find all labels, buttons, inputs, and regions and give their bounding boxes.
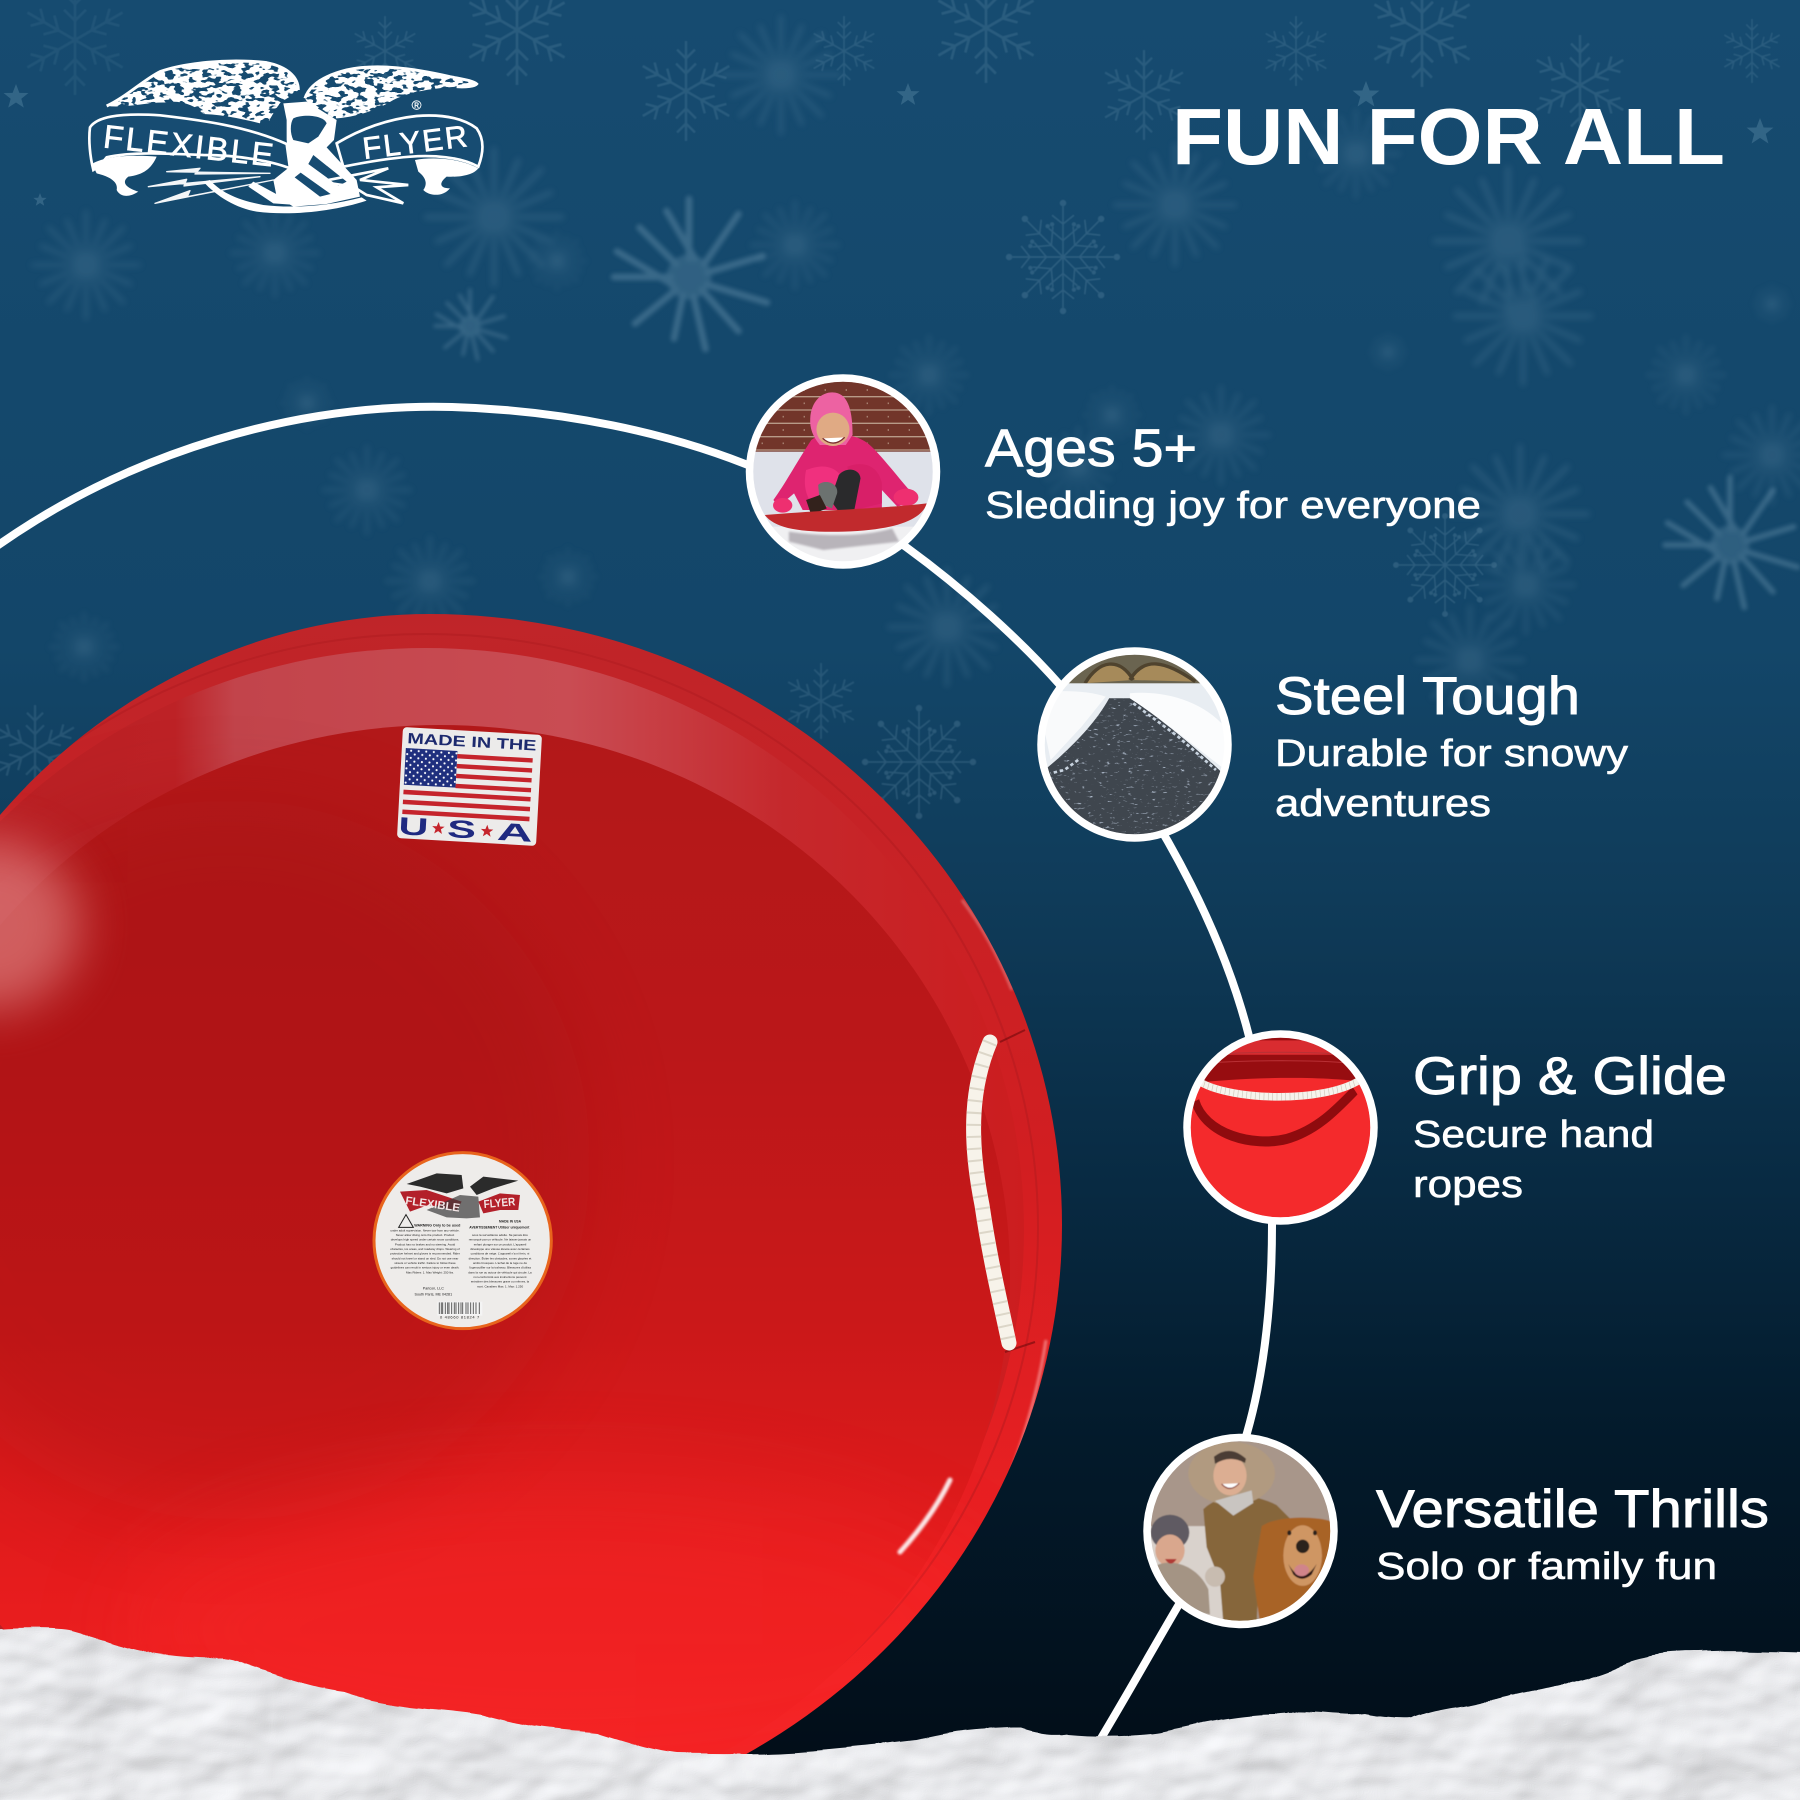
label fine print: conditions de neige. L'appareil n'a ni frein, ni: [471, 1252, 530, 1256]
label fine print: Paricon, LLC: [423, 1286, 444, 1290]
feature text: steel tough: Steel Tough: [1275, 667, 1580, 726]
feature text: ages 5+: Ages 5+: [985, 419, 1197, 478]
label fine print: Max Riders: 1. Max Weight: 250 lbs.: [406, 1270, 454, 1274]
feature text: steel tough: Durable for snowy: [1275, 733, 1628, 775]
label fine print: develops high speed under certain snow conditions.: [391, 1238, 459, 1242]
feature text: ages 5+: [985, 419, 1481, 527]
sled rim ring lines: [70, 633, 1039, 1664]
label fine print: obstacles, ice areas, and roadway drops. Wearing of: [390, 1247, 460, 1251]
feature text: grip and glide: ropes: [1413, 1164, 1523, 1206]
circle photo: child on sled: [746, 374, 940, 569]
child snowsuit: [773, 434, 918, 510]
label fine print: mort. Cavaliers Max: 1. Max: 1.250: [477, 1284, 523, 1288]
left gloss highlight: [0, 840, 80, 1010]
snow bank: [0, 1628, 1800, 1800]
lower sweep: [203, 180, 367, 213]
sticker: made in the USA: U: [398, 813, 429, 842]
mittens: [773, 498, 792, 513]
dog: [1253, 1518, 1333, 1623]
label fine print: arrêts brusques. L'achat de la luge ne de: [473, 1261, 527, 1265]
specular streaks: [900, 1480, 950, 1552]
feature text: versatile thrills: [1376, 1480, 1769, 1588]
label fine print: MADE IN USA: [499, 1220, 522, 1224]
feature text: grip and glide: Secure hand: [1413, 1114, 1654, 1156]
label fine print: non-conformité aux instructions peuvent: [474, 1275, 527, 1279]
barcode: [437, 1302, 482, 1320]
label fine print: remorqué par un véhicule. Ne laisser jamais un: [469, 1238, 532, 1242]
connecting curved line: [0, 407, 1272, 1740]
sticker: made in the USA: A: [496, 819, 533, 848]
logo text FLYER: FLYER: [361, 119, 469, 166]
arrows: [148, 168, 408, 203]
label fine print: entraîner des blessures grave ou mêmes, la: [471, 1280, 529, 1284]
eagle right wing: [305, 67, 477, 118]
label fine print: should not kneel or stand on sled. Do not use near: [392, 1256, 458, 1260]
label fine print: protective helmet and gloves is recommended. Rider: [390, 1252, 460, 1256]
eagle left wing: [107, 61, 298, 125]
label fine print: Never allow diving onto the product. Product: [396, 1233, 454, 1237]
label fine print: développe une vitesse élevée avec certaines: [470, 1247, 530, 1251]
label fine print: enfant plonger sur ce produit. L'appareil: [474, 1242, 527, 1246]
label logo: FLYER: [483, 1196, 516, 1211]
barcode: 0 48660 81824 7: [440, 1315, 480, 1320]
sled inner dish: [0, 725, 1010, 1800]
feature text: grip and glide: Grip & Glide: [1413, 1047, 1727, 1106]
sled body and rim: [0, 614, 1062, 1800]
label fine print: direction. Éviter les obstacles, zones glacées et: [469, 1255, 532, 1260]
warning triangle: [399, 1215, 413, 1227]
feature text: steel tough: adventures: [1275, 783, 1491, 825]
sticker: made in the USA: [397, 727, 542, 848]
rope shadow: [1195, 1090, 1355, 1141]
label fine print: l'ogenouilller sur la traîneau. Blessures d'utilisa: [469, 1266, 531, 1270]
sticker: made in the USA: S: [446, 816, 477, 845]
handle slits: [1000, 1030, 1035, 1352]
left ribbon: [89, 115, 290, 170]
label fine print: sous la surveillance adulte. Ne jamais être: [472, 1233, 528, 1237]
feature text: versatile thrills: Solo or family fun: [1376, 1546, 1717, 1588]
feature text: versatile thrills: Versatile Thrills: [1376, 1480, 1769, 1539]
label fine print: guidelines can result in serious injury or even death.: [391, 1266, 459, 1270]
rope: [1200, 1080, 1360, 1097]
label fine print: South Paris, ME 04281: [415, 1292, 452, 1296]
Flexible Flyer logo: [89, 61, 482, 213]
registered mark: ®: [412, 97, 422, 112]
logo text FLEXIBLE: FLEXIBLE: [102, 117, 275, 173]
sled in photo: [765, 503, 927, 532]
feature text: grip and glide: [1413, 1047, 1727, 1206]
label fine print: under adult supervision. Never tow from any vehicle.: [390, 1228, 460, 1232]
background snowflakes: [0, 0, 1800, 819]
circle photo: rope handle on red sled: [1183, 1029, 1380, 1227]
label fine print: WARNING Only to be used: [414, 1224, 460, 1228]
right ribbon: [337, 116, 482, 167]
label fine print: AVERTISSEMENT Utiliser uniquement: [469, 1226, 530, 1230]
child: [1151, 1515, 1189, 1550]
round warning label: [374, 1153, 551, 1329]
circle photo: family with dog: [1143, 1434, 1340, 1631]
feature text: ages 5+: Sledding joy for everyone: [985, 485, 1481, 527]
eagle body and shield: [273, 102, 360, 207]
label fine print: streets or vehicle traffic. Failure to follow these: [394, 1261, 456, 1265]
woman coat and hood: [1203, 1496, 1293, 1623]
label fine print: Product has no brakes and no steering. Avoid: [395, 1242, 455, 1246]
feature text: steel tough: [1275, 667, 1628, 825]
sled: [0, 614, 1062, 1800]
sticker: made in the USA: MADE IN THE: [407, 731, 537, 755]
circle photo: shovelled snowy path: [1037, 647, 1233, 843]
label fine print: dans la rue ou autour de véhicule qui circule. La: [468, 1270, 532, 1274]
label logo: [400, 1173, 520, 1218]
rope handle: [974, 1042, 1009, 1343]
label fine print: [390, 1220, 532, 1296]
title: FUN FOR ALL: [1172, 92, 1725, 181]
boots: [833, 470, 860, 510]
label logo: FLEXIBLE: [405, 1195, 461, 1215]
child hat: [810, 392, 853, 445]
